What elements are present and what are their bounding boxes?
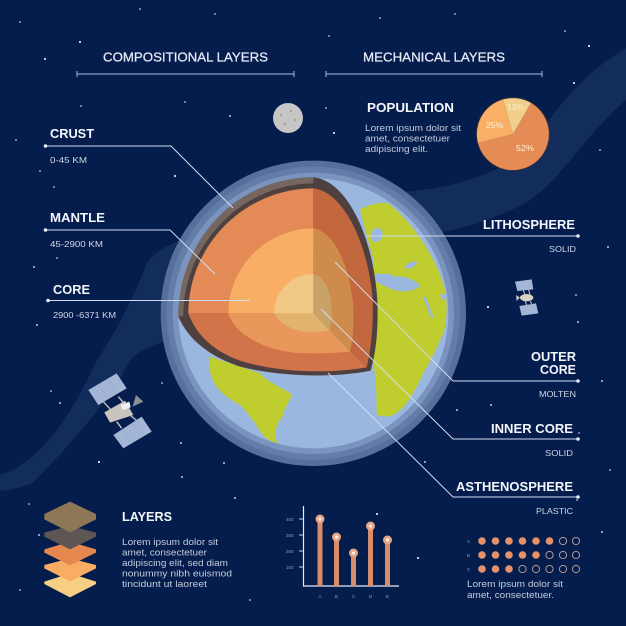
label: asthenosphere: PLASTIC xyxy=(536,506,573,516)
heading: compositional layers: COMPOSITIONAL LAYERS xyxy=(103,50,268,64)
land: africa and europe xyxy=(360,203,447,416)
dot matrix chart: A xyxy=(467,539,470,544)
text block: population: amet, consectetuer xyxy=(365,134,450,144)
pie chart: population: 13% xyxy=(507,102,524,112)
bar chart: 200 xyxy=(286,549,294,554)
label: inner core xyxy=(321,309,580,458)
icon: layers stack xyxy=(44,502,96,597)
bar chart: 100 xyxy=(286,565,294,570)
label: asthenosphere xyxy=(328,373,580,516)
crust outline xyxy=(178,177,378,375)
label: inner core: SOLID xyxy=(545,448,573,458)
text block: population xyxy=(365,100,461,155)
label: crust: 0-45 KM xyxy=(50,155,87,165)
text block: dot chart caption xyxy=(467,579,563,601)
bar chart: E xyxy=(386,594,389,599)
dot matrix chart: B xyxy=(467,553,470,558)
label: outer core: CORE xyxy=(540,362,576,377)
text block: layers: amet, consectetuer xyxy=(122,548,207,558)
label: outer core: OUTER xyxy=(531,349,577,364)
bar chart: A xyxy=(318,594,322,599)
bar chart: B xyxy=(335,594,338,599)
heading: mechanical layers xyxy=(326,50,542,77)
icon: small satellite xyxy=(515,279,538,316)
seas xyxy=(372,228,447,318)
inner core xyxy=(274,274,332,332)
globe with cutaway xyxy=(161,161,466,466)
icon: large satellite xyxy=(88,373,152,448)
pie chart: population: 25% xyxy=(486,120,503,130)
heading: mechanical layers: MECHANICAL LAYERS xyxy=(363,50,505,64)
dot matrix chart: C xyxy=(467,567,471,572)
dot matrix chart xyxy=(467,537,580,573)
label: lithosphere: LITHOSPHERE xyxy=(483,217,575,232)
ocean xyxy=(178,178,448,448)
label: mantle xyxy=(44,210,215,274)
label: core: 2900 -6371 KM xyxy=(53,310,116,320)
text block: population: adipiscing elit. xyxy=(365,144,428,155)
text block: population: POPULATION xyxy=(367,100,454,115)
label: outer core: MOLTEN xyxy=(539,389,576,399)
label: crust xyxy=(44,126,233,208)
text block: layers: Lorem ipsum dolor sit xyxy=(122,537,218,548)
land: south america xyxy=(209,357,292,443)
bar chart: C xyxy=(352,594,356,599)
text block: layers: tincidunt ut laoreet xyxy=(122,579,207,590)
text block: layers: nonummy nibh euismod xyxy=(122,568,232,580)
text block: dot chart caption: Lorem ipsum dolor sit xyxy=(467,579,563,590)
label: lithosphere xyxy=(366,217,580,254)
bar chart xyxy=(286,506,399,599)
label: crust: CRUST xyxy=(50,126,94,141)
bar chart: D xyxy=(369,594,373,599)
label: mantle: 45-2900 KM xyxy=(50,239,103,249)
text block: layers: LAYERS xyxy=(122,509,172,524)
text block: layers xyxy=(122,509,232,590)
label: lithosphere: SOLID xyxy=(549,244,576,254)
text block: population: Lorem ipsum dolor sit xyxy=(365,123,461,134)
pie chart: population: 52% xyxy=(516,143,534,153)
label: core xyxy=(46,282,250,320)
label: mantle: MANTLE xyxy=(50,210,105,225)
text block: layers: adipiscing elit, sed diam xyxy=(122,558,228,569)
label: inner core: INNER CORE xyxy=(491,421,573,436)
pie chart: population xyxy=(476,97,550,171)
heading: compositional layers xyxy=(77,50,294,77)
label: core: CORE xyxy=(53,282,90,297)
mantle xyxy=(188,188,373,371)
label: outer core xyxy=(335,262,580,399)
bar chart: 400 xyxy=(286,517,294,522)
icon: moon xyxy=(273,103,303,133)
text block: dot chart caption: amet, consectetuer. xyxy=(467,590,554,601)
bar chart: 300 xyxy=(286,533,294,538)
label: asthenosphere: ASTHENOSPHERE xyxy=(456,479,573,494)
atmosphere rings xyxy=(161,161,466,466)
outer core xyxy=(228,228,354,353)
